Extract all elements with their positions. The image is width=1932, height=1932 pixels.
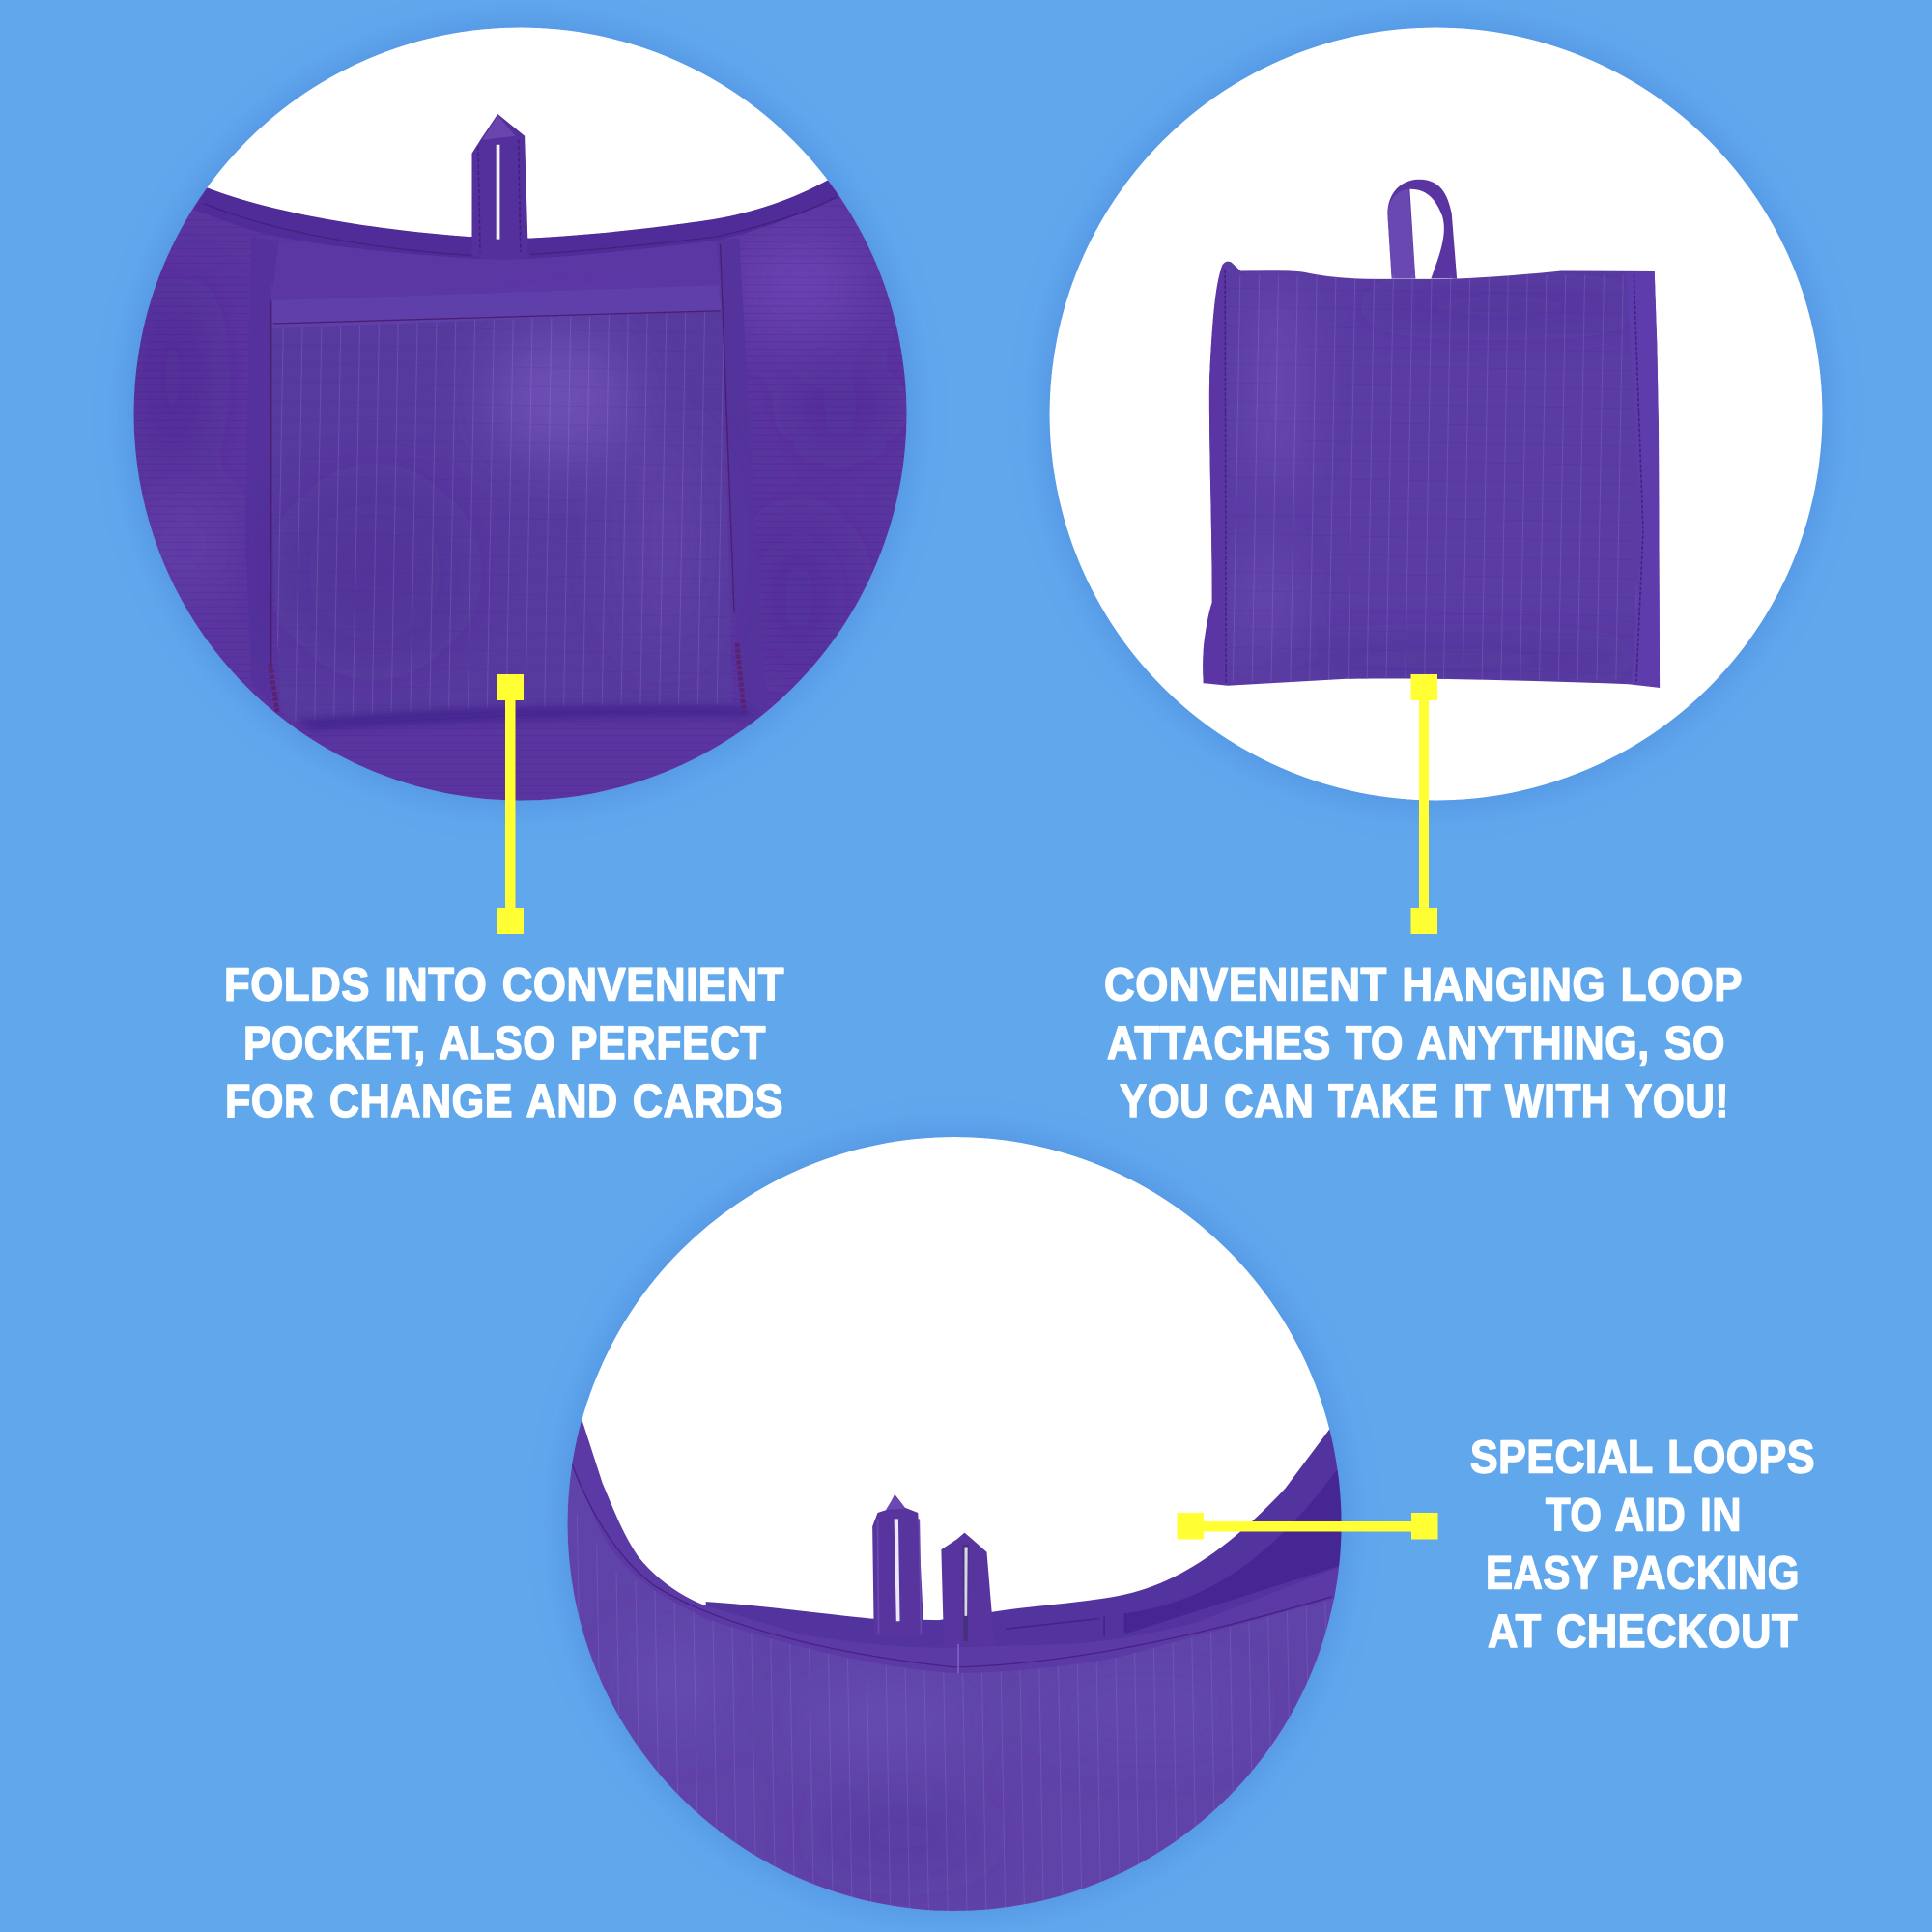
caption: packing loops: AT CHECKOUT: [1488, 1606, 1798, 1658]
front of bag: [561, 1419, 1345, 1932]
side band right: [717, 239, 746, 352]
caption: packing loops: [1470, 1432, 1815, 1658]
connector: hanging loop: [1410, 674, 1437, 934]
center seam: [957, 1644, 960, 1673]
panel: packing loops photo: [561, 1137, 1368, 1932]
hem stitching: [1225, 270, 1643, 684]
caption: packing loops: SPECIAL LOOPS: [1470, 1432, 1815, 1484]
pocket stitching: [271, 244, 734, 664]
back hem shadow: [1125, 1463, 1342, 1634]
lower stitch knots: [270, 643, 745, 715]
front grid: [561, 1489, 1337, 1932]
short tab: [941, 1533, 995, 1646]
caption: packing loops: EASY PACKING: [1486, 1548, 1800, 1600]
side band left: [245, 545, 246, 546]
caption: pocket: FOLDS INTO CONVENIENT: [224, 960, 784, 1010]
loop highlight: [1387, 189, 1415, 278]
panel: hanging loop photo: [1049, 27, 1822, 800]
hanging tab: [471, 114, 528, 260]
back stitch: [1006, 1613, 1125, 1636]
folded bag: [1203, 262, 1660, 688]
caption: hanging loop: CONVENIENT HANGING LOOP: [1104, 960, 1743, 1010]
upper panel: [278, 242, 719, 285]
caption: hanging loop: ATTACHES TO ANYTHING, SO: [1107, 1018, 1725, 1069]
pocket grid: [271, 311, 732, 723]
connector: pocket: [497, 674, 524, 934]
caption: pocket: FOR CHANGE AND CARDS: [225, 1076, 783, 1127]
back of bag: [705, 1430, 1341, 1648]
caption: pocket: [224, 960, 784, 1127]
right hem: [1626, 271, 1660, 688]
hanging loop: [1387, 180, 1457, 278]
top binding: [193, 181, 839, 259]
pocket top hem: [270, 285, 722, 328]
tall tab: [872, 1494, 924, 1637]
bag grid: [1225, 275, 1639, 682]
pocket: [271, 285, 732, 723]
caption: hanging loop: YOU CAN TAKE IT WITH YOU!: [1120, 1076, 1729, 1127]
pocket sheen: [485, 327, 639, 469]
connector: packing loops: [1177, 1513, 1437, 1540]
caption: packing loops: TO AID IN: [1546, 1490, 1742, 1542]
pocket bottom shadow: [295, 705, 757, 731]
caption: hanging loop: [1104, 960, 1743, 1127]
ripstop grid: [145, 213, 895, 800]
front shading: [634, 1636, 1249, 1859]
bag body: [133, 180, 906, 800]
front binding: [571, 1419, 1345, 1673]
top binding stitch: [204, 197, 837, 256]
left hem: [1203, 265, 1226, 684]
panel: folds into pocket photo: [133, 27, 906, 800]
fabric shading: [136, 234, 887, 679]
caption: pocket: POCKET, ALSO PERFECT: [243, 1018, 766, 1069]
binding stitch: [571, 1463, 1332, 1667]
bag shading: [1256, 325, 1490, 680]
